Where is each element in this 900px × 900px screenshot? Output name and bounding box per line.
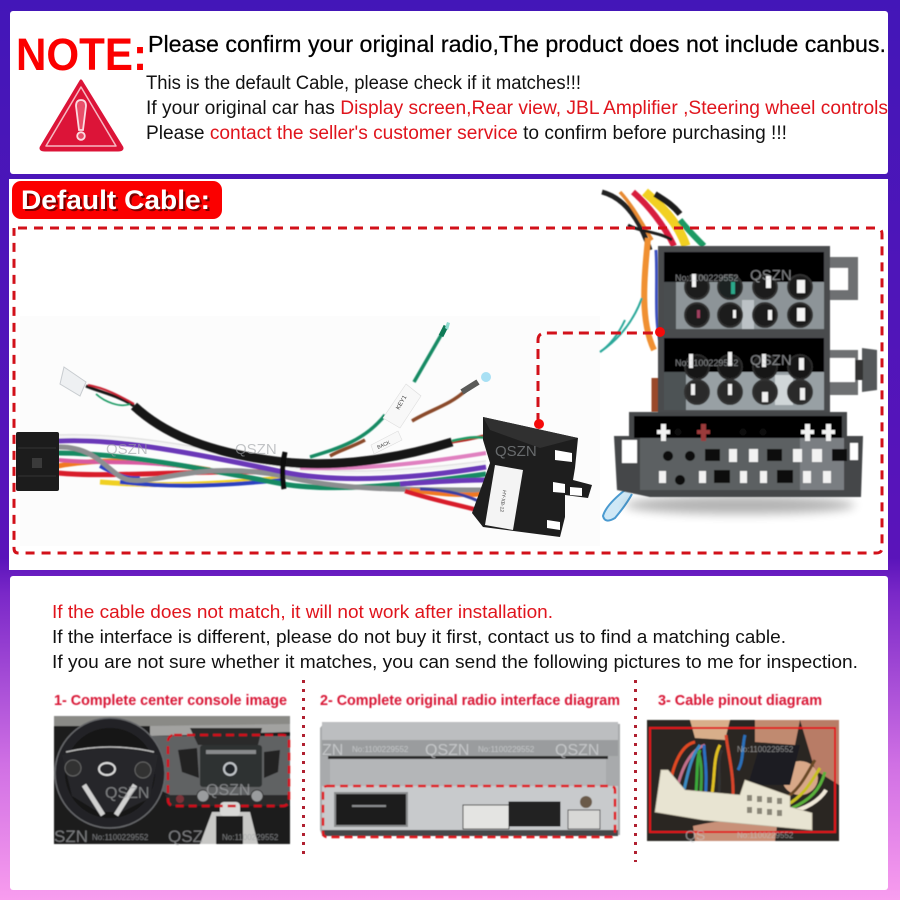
middle block [658, 333, 877, 412]
brown wire [330, 391, 465, 456]
heading: NOTE: NOTE: [16, 29, 147, 80]
photo: center console: No:1100229552 [222, 833, 279, 842]
watermark [106, 441, 537, 460]
photo: center console: QSZN [105, 785, 149, 802]
divider 1 [302, 680, 305, 860]
divider 2 [634, 680, 637, 862]
headline: Please confirm your original radio,The product does not include canbus. [148, 31, 886, 57]
wire label 2 [371, 431, 402, 454]
watermark: QSZN [106, 441, 148, 458]
wire bundle [58, 435, 486, 512]
wire label 2: BACK [376, 440, 392, 451]
photo: radio interface: No:1100229552 [478, 745, 535, 754]
panel: matching guidance [10, 576, 888, 890]
photo: radio interface: QSZN [425, 742, 469, 759]
caption 2: 2- Complete original radio interface diagram [320, 692, 620, 709]
black interface [335, 793, 407, 826]
green wire [310, 330, 444, 457]
watermark: QSZN [495, 443, 537, 460]
cable harness [58, 330, 488, 512]
text: original car line: If your original car has Display screen,Rear view, JBL Amplifier ,Steering wheel controls [146, 98, 888, 119]
right connector [472, 417, 592, 537]
text: contact line: Please contact the seller's customer service to confirm before purchasing !!! [146, 123, 787, 144]
text: default cable line: This is the default Cable, please check if it matches!!! [146, 73, 581, 94]
panel: default cable [9, 179, 888, 570]
inspection text: If you are not sure whether it matches, you can send the following pictures to me for inspection. [52, 651, 858, 672]
heading pill: default cable: Default Cable: [21, 185, 210, 215]
white mini connector [60, 367, 86, 396]
instruction text: If the interface is different, please do not buy it first, contact us to find a matching cable. [52, 626, 786, 647]
watermark [675, 267, 792, 369]
dashed frame [14, 228, 882, 553]
lower block [614, 412, 863, 497]
icon: blue terminal [603, 490, 632, 521]
photo: center console: QSZN [206, 782, 250, 799]
warning text: If the cable does not match, it will not work after installation. [52, 601, 553, 622]
wire label 1 [383, 384, 421, 428]
brown terminal [462, 372, 491, 392]
photo: center console [54, 716, 290, 846]
photo: radio interface: ZN [322, 742, 343, 759]
photo: cable pinout: No:1100229552 [737, 831, 794, 840]
wire label 1: KEY1 [396, 394, 409, 411]
right connector: HY-XB-12 [498, 490, 507, 513]
watermark: QSZN [235, 441, 277, 458]
upper block [658, 246, 858, 333]
photo: center console: No:1100229552 [92, 833, 149, 842]
watermark: QSZN [750, 352, 792, 369]
heading pill: default cable: Default Cable: [23, 187, 212, 217]
watermark: No:1100229552 [675, 358, 738, 368]
small white interface [568, 810, 600, 829]
photo: wires above large connector [600, 192, 704, 412]
black interface 2 [509, 802, 560, 826]
watermark: No:1100229552 [675, 273, 738, 283]
photo: cable pinout: No:1100229552 [737, 745, 794, 754]
green terminal [441, 322, 450, 336]
callout line [534, 327, 665, 429]
black sheathed cable [134, 406, 452, 464]
photo: cable pinout: QS [685, 827, 705, 843]
cable tie [283, 452, 285, 489]
photo: center console: QSZ [168, 827, 203, 846]
caption 3: 3- Cable pinout diagram [658, 692, 822, 709]
large connector front view [614, 246, 877, 514]
watermark: QSZN [750, 267, 792, 284]
icon: warning triangle [41, 81, 122, 150]
photo: radio interface [320, 722, 620, 837]
photo: radio interface: QSZN [555, 742, 599, 759]
photo: radio interface: No:1100229552 [352, 745, 409, 754]
caption 1: 1- Complete center console image [54, 692, 287, 709]
photo backdrop [20, 316, 600, 546]
photo: center console: SZN [54, 827, 88, 846]
panel: note [10, 11, 888, 174]
white interface [463, 805, 509, 829]
heading pill: default cable [12, 181, 222, 219]
photo: cable pinout [647, 720, 839, 843]
left connector [16, 432, 59, 491]
